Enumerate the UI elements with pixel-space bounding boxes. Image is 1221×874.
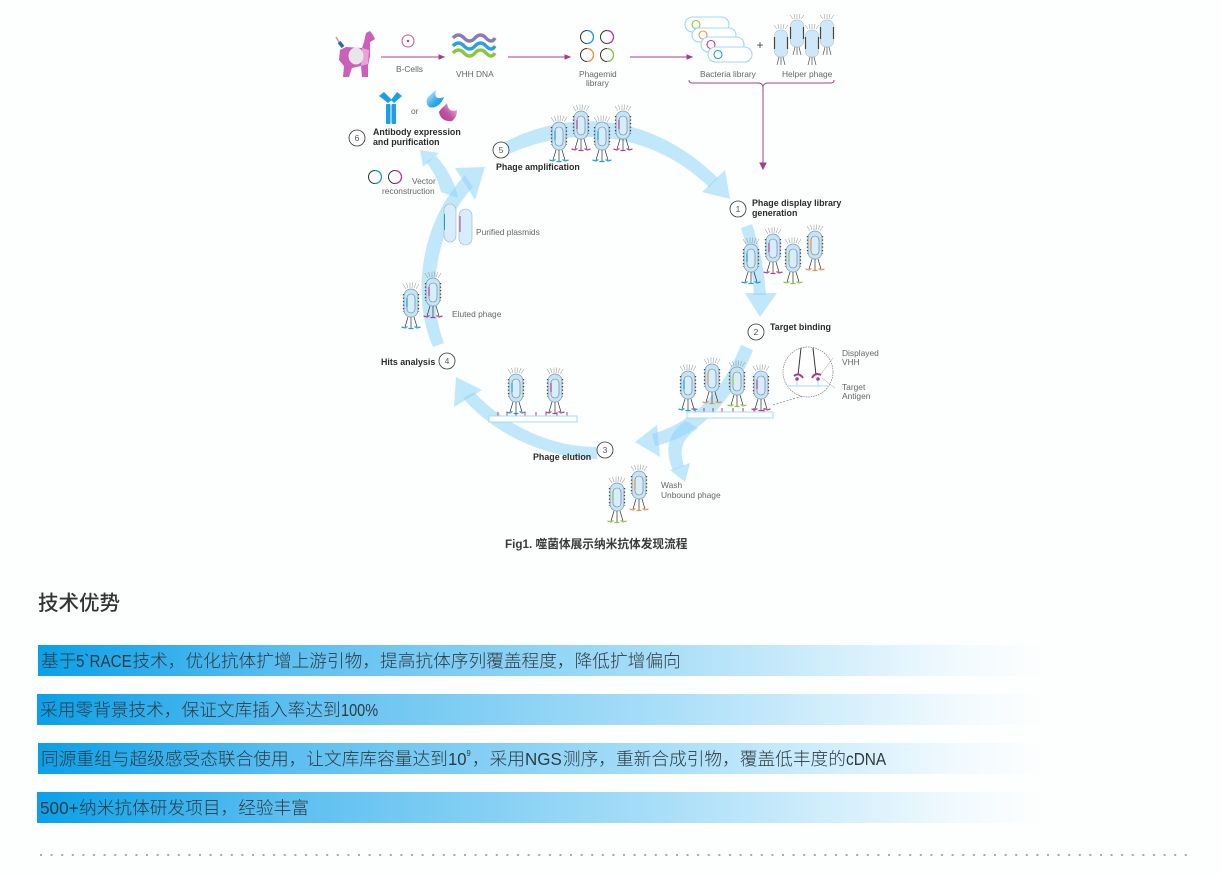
label: or: or	[411, 106, 419, 116]
divider: dotted line	[40, 854, 1187, 856]
advantage text 2: 采用零背景技术，保证文库插入率达到	[40, 700, 341, 720]
phages: unbound	[608, 464, 648, 522]
label: vector reconstruction: Vector	[412, 176, 436, 186]
label: displayed VHH: Displayed	[842, 348, 879, 358]
arrow: phage elution to hits analysis	[454, 377, 597, 459]
step 6: antibody expression and purification	[349, 127, 461, 147]
arrow: phage amplification to library generation	[503, 121, 730, 199]
label: VHH DNA: VHH DNA	[456, 69, 494, 79]
advantage text 3: NGS	[525, 749, 562, 769]
phages: amplification	[550, 104, 632, 162]
arrow: wash unbound phage	[668, 421, 698, 482]
arrow: alpaca to VHH DNA	[381, 55, 444, 59]
step 1: phage display library generation: Phage display library	[752, 198, 841, 208]
label: plus: +	[756, 38, 764, 52]
advantage bar 4	[37, 792, 1042, 822]
step 6: antibody expression and purification: 6	[355, 133, 360, 143]
arrow: phagemid library to bacteria library	[630, 55, 692, 59]
icon: purified plasmids	[444, 204, 472, 245]
heading: technical advantages: 技术优势	[38, 592, 120, 615]
arrow: VHH DNA to phagemid library	[508, 55, 570, 59]
label: wash unbound phage: Wash	[661, 480, 682, 490]
step 2: target binding: 2	[754, 327, 759, 337]
step 1: phage display library generation: 1	[736, 204, 741, 214]
advantage text 2: 100%	[341, 700, 378, 720]
label: displayed VHH: VHH	[842, 357, 860, 367]
advantage text 3: cDNA	[846, 749, 886, 769]
caption: Fig1. 噬菌体展示纳米抗体发现流程	[505, 538, 687, 551]
label: Phagemid library: library	[586, 78, 610, 88]
panel: bound phages on antigen plate	[678, 358, 773, 418]
advantage text 3: 109	[448, 749, 471, 769]
step 3: phage elution: Phage elution	[533, 452, 591, 462]
step 5: phage amplification: 5	[499, 145, 504, 155]
label: vector reconstruction	[382, 176, 436, 196]
icon: VHH DNA waves	[453, 35, 495, 56]
label: eluted phage: Eluted phage	[452, 309, 502, 319]
arrow: hits analysis to phage amplification	[421, 167, 485, 347]
label: vector reconstruction: reconstruction	[382, 186, 435, 196]
step 2: target binding: Target binding	[770, 322, 831, 332]
label: target antigen	[842, 382, 871, 401]
icon: bacteria library	[685, 17, 752, 62]
label: purified plasmids: Purified plasmids	[476, 227, 540, 237]
panel: eluted phages on plate	[489, 368, 577, 422]
icon: phagemid library	[580, 30, 614, 62]
advantage bar 1	[38, 645, 1043, 676]
icon: vector reconstruction plasmids	[368, 170, 402, 184]
advantage bar 2	[37, 694, 1042, 725]
step 4: hits analysis: Hits analysis	[381, 357, 435, 367]
bracket and arrow to phage display library	[689, 80, 834, 169]
step 6: antibody expression and purification: and purification	[373, 137, 440, 147]
label: Helper phage: Helper phage	[782, 69, 833, 79]
step 3: phage elution: 3	[603, 445, 608, 455]
icon: alpaca	[336, 31, 375, 77]
label: Bacteria library: Bacteria library	[700, 69, 757, 79]
advantage bar 3	[38, 743, 1043, 774]
advantage text 4: 500+	[40, 798, 79, 818]
step 4: hits analysis: 4	[445, 356, 450, 366]
step 3: phage elution	[533, 442, 613, 462]
icon: helper phage	[774, 14, 834, 65]
label: target antigen: Target	[842, 382, 866, 392]
label: B-Cells: B-Cells	[396, 64, 423, 74]
label: Phagemid library	[579, 69, 617, 88]
phages: eluted phage	[402, 272, 442, 328]
advantage text 1: 5`RACE	[76, 651, 132, 671]
arrow: to antibody expression	[420, 150, 458, 198]
arrow: target binding to phage elution	[635, 345, 753, 457]
label: displayed VHH	[842, 348, 879, 367]
advantage text 1: 基于 技术，优化抗体扩增上游引物，提高抗体序列覆盖程度，降低扩增偏向	[41, 651, 681, 671]
step 5: phage amplification: Phage amplification	[496, 162, 580, 172]
step 1: phage display library generation	[730, 198, 841, 218]
icon: nanobodies	[427, 90, 457, 121]
label: target antigen: Antigen	[842, 391, 871, 401]
label: Phagemid library: Phagemid	[579, 69, 617, 79]
advantage text 3: 同源重组与超级感受态联合使用，让文库库容量达到 ，采用 测序，重新合成引物，覆盖低丰度的	[41, 749, 846, 769]
step 2: target binding	[748, 322, 831, 340]
step 6: antibody expression and purification: Antibody expression	[373, 127, 461, 137]
step 1: phage display library generation: generation	[752, 208, 797, 218]
callout: magnified displayed VHH and target antigen	[773, 347, 835, 405]
icon: B-cell	[402, 35, 414, 47]
step 5: phage amplification	[493, 142, 580, 172]
icon: antibody	[379, 92, 402, 124]
label: wash unbound phage	[661, 480, 721, 500]
phages: displayed library	[742, 224, 824, 284]
step 4: hits analysis	[381, 353, 455, 369]
arrow: library generation to target binding	[741, 224, 777, 317]
advantage text 4: 纳米抗体研发项目，经验丰富	[79, 798, 309, 818]
label: wash unbound phage: Unbound phage	[661, 490, 721, 500]
